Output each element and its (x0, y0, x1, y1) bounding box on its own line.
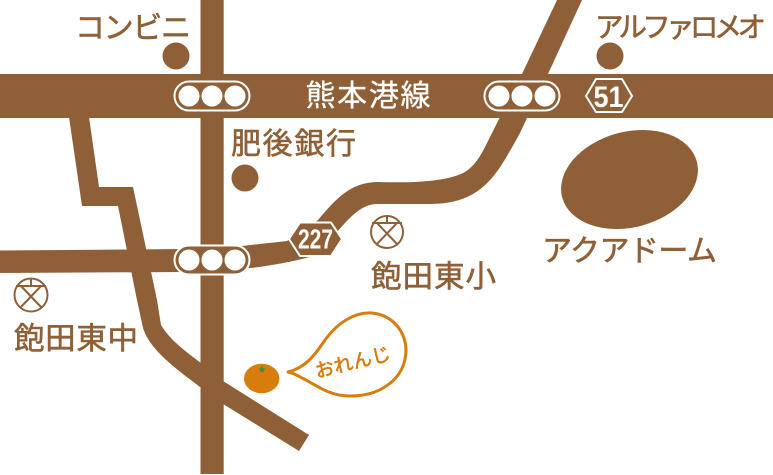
route 51 sign: 51 (594, 81, 624, 114)
landmark: Akita Higashi junior high school: 飽田東中 (14, 322, 138, 356)
landmark: Higo Bank: 肥後銀行 (231, 128, 356, 161)
traffic light 1 (174, 82, 250, 110)
traffic light 3 (174, 246, 250, 274)
route 51 sign (586, 79, 632, 114)
landmark: Alfa Romeo (595, 12, 766, 70)
route 227 sign: 227 (298, 224, 333, 254)
west road (0, 249, 185, 273)
landmark: convenience store: コンビニ (75, 12, 191, 45)
callout: Orange (288, 313, 406, 396)
callout: Orange: おれんじ (313, 344, 393, 383)
main road: Kumamoto Port Line (0, 74, 773, 118)
landmark: Akita Higashi junior high school (14, 278, 138, 356)
curved road to north-east (180, 0, 582, 272)
landmark: Aqua Dome: アクアドーム (542, 235, 717, 268)
landmark: Aqua Dome (542, 115, 717, 268)
landmark: Akita Higashi elementary school (371, 216, 496, 294)
landmark: convenience store (75, 12, 191, 70)
icon: orange (244, 364, 279, 393)
landmark: Akita Higashi elementary school: 飽田東小 (371, 260, 496, 294)
road name: 熊本港線 (306, 80, 430, 113)
vertical road (200, 0, 224, 474)
landmark: Alfa Romeo: アルファロメオ (595, 12, 766, 44)
diagonal road (69, 117, 309, 451)
landmark: Higo Bank (231, 128, 356, 192)
traffic light 2 (484, 82, 560, 110)
